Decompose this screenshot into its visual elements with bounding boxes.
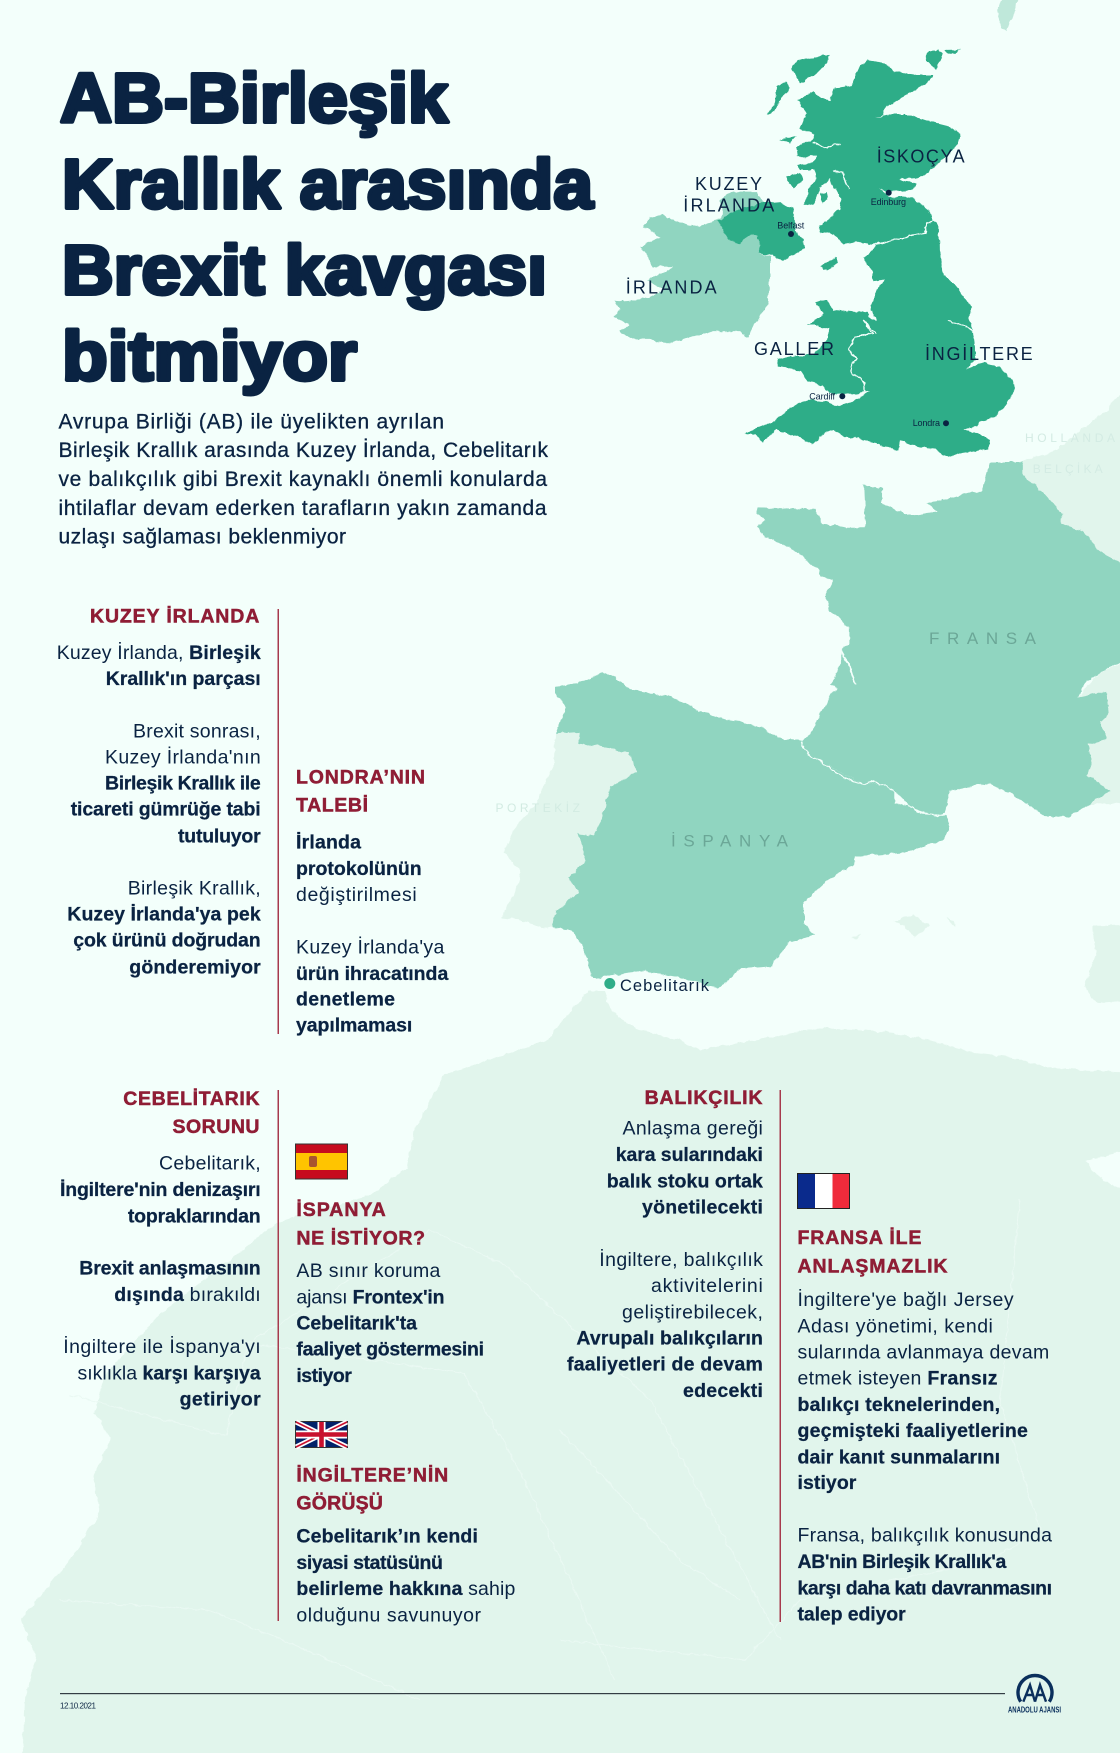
gironde estuary (841, 650, 856, 685)
icon: uk flag (295, 1421, 348, 1448)
heading: ispanya ne istiyor: İSPANYA (296, 1198, 386, 1221)
map: north africa (21, 991, 1120, 1753)
text: spain demands: ajansı Frontex'in (296, 1286, 445, 1308)
text: fishing facts: Avrupalı balıkçıların (576, 1328, 763, 1350)
text: cebelitarik facts: Cebelitarık, (159, 1153, 261, 1175)
intro text: Birleşik Krallık arasında Kuzey İrlanda, Cebelitarık (58, 439, 548, 462)
map labels: cities: Belfast (777, 220, 805, 230)
text: londra demands: Kuzey İrlanda'ya (296, 935, 444, 958)
text: spain demands: faaliyet göstermesini (296, 1339, 484, 1361)
icon: french flag (797, 1173, 850, 1209)
text: cebelitarik facts: Brexit anlaşmasının (79, 1258, 261, 1280)
intro text (58, 411, 548, 548)
map labels: countries: İSKOÇYA (877, 146, 965, 166)
map labels: countries (496, 146, 1115, 851)
text: kuzey irlanda facts: Krallık'ın parçası (106, 668, 261, 690)
map labels: cities: Cardiff (809, 391, 835, 401)
map labels: countries: İNGİLTERE (925, 344, 1033, 364)
heading: fransa ile anlasmazlik: ANLAŞMAZLIK (798, 1255, 948, 1277)
map labels: countries: İRLANDA (683, 196, 774, 216)
text: france dispute: AB'nin Birleşik Krallık'a (798, 1551, 1007, 1573)
text: uk view (296, 1526, 516, 1627)
text: londra demands: protokolünün (296, 858, 422, 880)
intro text: Avrupa Birliği (AB) ile üyelikten ayrılan (58, 411, 444, 434)
text: fishing facts: İngiltere, balıkçılık (599, 1248, 763, 1271)
map labels: countries: GALLER (754, 339, 834, 359)
heading: fransa ile anlasmazlik (798, 1226, 948, 1277)
text: france dispute: İngiltere'ye bağlı Jersey (798, 1288, 1014, 1311)
text: cebelitarik facts: sıklıkla karşı karşıya (78, 1363, 261, 1385)
text: fishing facts (567, 1118, 763, 1402)
text: france dispute: dair kanıt sunmalarını (798, 1446, 1000, 1468)
text: cebelitarik facts: topraklarından (128, 1205, 261, 1227)
footer line (60, 1693, 1005, 1694)
heading: cebelitarik sorunu: SORUNU (172, 1116, 260, 1138)
text: france dispute: etmek isteyen Fransız (798, 1368, 998, 1390)
heading: londra'nin talebi (296, 766, 425, 817)
intro text: uzlaşı sağlaması beklenmiyor (58, 526, 346, 548)
map: great britain (745, 0, 1022, 457)
text: france dispute: talep ediyor (798, 1604, 906, 1626)
panel: kuzey irlanda (57, 604, 448, 1037)
heading: balikcilik: BALIKÇILIK (645, 1087, 762, 1109)
france (758, 462, 1120, 818)
text: cebelitarik facts: İngiltere ile İspanya'yı (63, 1335, 261, 1358)
intro text: ve balıkçılık gibi Brexit kaynaklı önemli konularda (58, 468, 547, 491)
date: 12.10.2021 (60, 1702, 97, 1710)
border france spain (800, 741, 945, 816)
text: kuzey irlanda facts: çok ürünü doğrudan (73, 930, 261, 952)
text: kuzey irlanda facts: tutuluyor (178, 825, 261, 847)
text: fishing facts: balık stoku ortak (607, 1170, 763, 1192)
title: AB-Birleşik (60, 59, 448, 137)
heading: ingiltere'nin gorusu (296, 1464, 448, 1515)
text: france dispute (798, 1288, 1052, 1626)
logo: anadolu ajansi (1008, 1676, 1061, 1714)
text: cebelitarik facts: dışında bırakıldı (114, 1284, 261, 1306)
map labels: cities: Edinburg (871, 197, 906, 207)
map labels: cities: Londra (913, 418, 940, 428)
map: western europe (500, 462, 1120, 988)
scottish islands (767, 49, 962, 270)
text: france dispute: Fransa, balıkçılık konusunda (798, 1524, 1052, 1546)
title: Krallık arasında (62, 145, 594, 223)
title: bitmiyor (62, 317, 357, 395)
map labels: countries: İSPANYA (671, 832, 789, 851)
text: france dispute: sularında avlanmaya devam (798, 1342, 1049, 1364)
divider (780, 1090, 781, 1622)
text: fishing facts: geliştirebilecek, (622, 1301, 763, 1323)
heading: kuzey irlanda: KUZEY İRLANDA (90, 604, 259, 627)
map labels: countries: HOLLANDA (1025, 431, 1115, 445)
heading: ingiltere'nin gorusu: İNGİLTERE’NİN (296, 1464, 448, 1486)
map: faint neighbouring land (851, 370, 1120, 1003)
text: spain demands: Cebelitarık'ta (296, 1313, 417, 1335)
logo: anadolu ajansi: ANADOLU AJANSI (1008, 1705, 1061, 1714)
borders and inlets (813, 142, 973, 392)
text: uk view: olduğunu savunuyor (296, 1605, 482, 1627)
map labels: countries: FRANSA (929, 629, 1037, 648)
text: fishing facts: Anlaşma gereği (622, 1118, 763, 1140)
text: londra demands (296, 830, 448, 1037)
text: fishing facts: edecekti (683, 1380, 763, 1402)
text: kuzey irlanda facts: Kuzey İrlanda'ya pek (67, 903, 261, 926)
text: fishing facts: faaliyetleri de devam (567, 1354, 763, 1376)
map: ireland (613, 192, 805, 343)
text: kuzey irlanda facts: Kuzey İrlanda'nın (105, 745, 261, 768)
heading: londra'nin talebi: TALEBİ (296, 794, 368, 817)
text: uk view: siyasi statüsünü (296, 1552, 443, 1574)
text: kuzey irlanda facts (57, 641, 261, 978)
text: cebelitarik facts (60, 1153, 261, 1411)
heading: cebelitarik sorunu: CEBELİTARIK (123, 1087, 260, 1110)
text: londra demands: değiştirilmesi (296, 884, 417, 906)
map labels: cities (777, 190, 949, 428)
text: france dispute: istiyor (798, 1472, 857, 1494)
divider (278, 609, 279, 1034)
text: spain demands: istiyor (296, 1365, 352, 1387)
text: kuzey irlanda facts: Birleşik Krallık ile (105, 772, 261, 794)
heading: fransa ile anlasmazlik: FRANSA İLE (798, 1226, 921, 1249)
intro text: ihtilaflar devam ederken tarafların yakın zamanda (58, 497, 547, 520)
text: cebelitarik facts: getiriyor (180, 1389, 261, 1411)
text: fishing facts: aktivitelerini (651, 1275, 763, 1297)
text: londra demands: yapılmaması (296, 1015, 412, 1037)
title: Brexit kavgası (62, 231, 547, 309)
heading: ingiltere'nin gorusu: GÖRÜŞÜ (296, 1492, 383, 1515)
map labels: countries: BELÇİKA (1033, 462, 1103, 476)
shetland (997, 0, 1022, 32)
text: cebelitarik facts: İngiltere'nin denizaşırı (60, 1178, 261, 1201)
text: kuzey irlanda facts: Brexit sonrası, (133, 720, 261, 742)
text: france dispute: balıkçı teknelerinden, (798, 1394, 1000, 1416)
title (60, 59, 594, 395)
text: kuzey irlanda facts: Birleşik Krallık, (128, 877, 261, 899)
northern ireland (717, 202, 805, 260)
map marker: gibraltar: Cebelitarık (620, 977, 710, 995)
text: fishing facts: kara sularındaki (616, 1144, 763, 1166)
panel: cebelitarik (60, 1087, 516, 1627)
heading: ispanya ne istiyor: NE İSTİYOR? (296, 1227, 425, 1250)
text: france dispute: Adası yönetimi, kendi (798, 1315, 993, 1337)
text: londra demands: İrlanda (296, 830, 361, 853)
text: londra demands: denetleme (296, 989, 395, 1011)
text: spain demands (296, 1260, 484, 1387)
text: uk view: belirleme hakkına sahip (296, 1578, 516, 1600)
text: kuzey irlanda facts: ticareti gümrüğe tabi (71, 799, 261, 821)
heading: cebelitarik sorunu (123, 1087, 260, 1138)
map labels: countries: KUZEY (695, 174, 762, 194)
panel: balikcilik (567, 1087, 1052, 1626)
text: france dispute: geçmişteki faaliyetlerine (798, 1420, 1028, 1442)
spain (553, 673, 949, 988)
icon: spanish flag (295, 1144, 348, 1180)
heading: ispanya ne istiyor (296, 1198, 425, 1250)
map labels: countries: PORTEKİZ (496, 801, 580, 815)
text: kuzey irlanda facts: gönderemiyor (129, 956, 261, 978)
heading: londra'nin talebi: LONDRA’NIN (296, 766, 425, 788)
text: france dispute: karşı daha katı davranmasını (798, 1577, 1052, 1599)
text: londra demands: ürün ihracatında (296, 963, 448, 985)
map labels: countries: İRLANDA (626, 277, 717, 297)
text: fishing facts: yönetilecekti (642, 1197, 763, 1219)
divider (278, 1090, 279, 1621)
text: uk view: Cebelitarık’ın kendi (296, 1526, 478, 1548)
portugal (500, 732, 637, 928)
text: spain demands: AB sınır koruma (296, 1260, 441, 1282)
text: kuzey irlanda facts: Kuzey İrlanda, Birleşik (57, 641, 261, 664)
